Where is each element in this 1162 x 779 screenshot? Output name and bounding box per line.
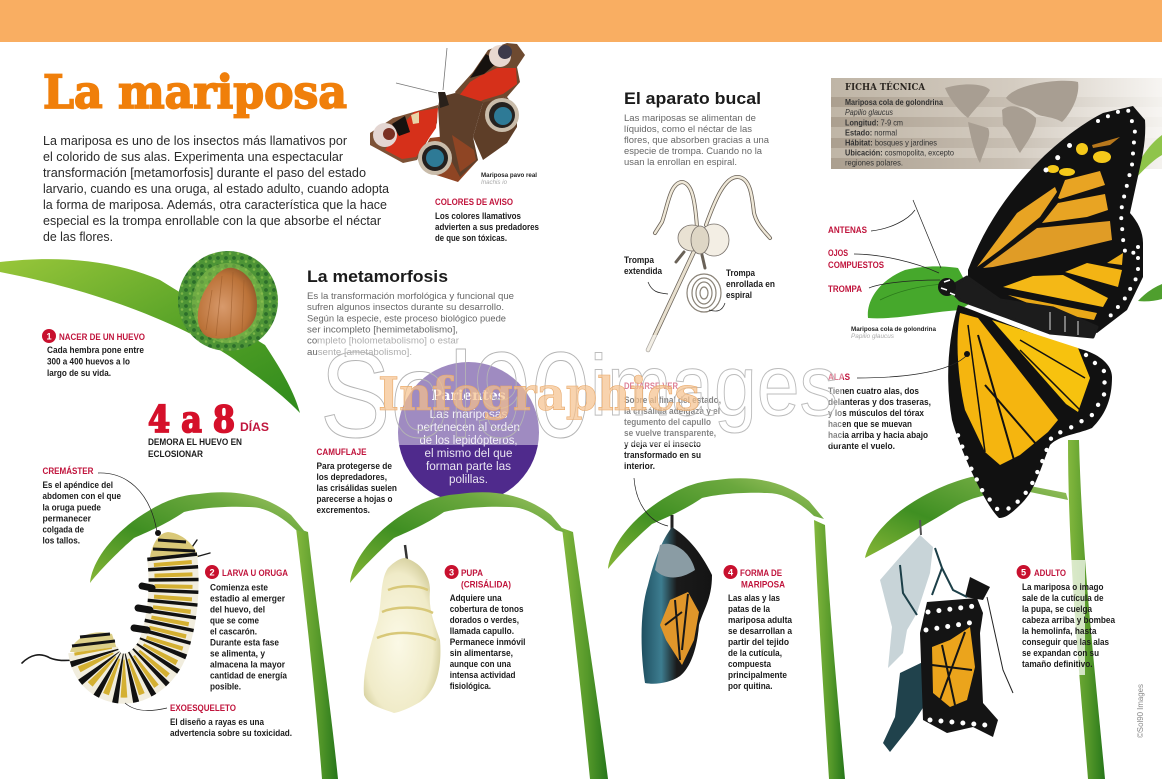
metamorfosis text: ausente [ametabolismo]. <box>307 347 412 358</box>
stat: 4 a 8 días: DÍAS <box>240 419 269 434</box>
step 2: larva: 2 <box>209 568 215 578</box>
panel: ficha técnica: Hábitat: bosques y jardines <box>845 138 937 148</box>
monarch butterfly <box>938 106 1145 518</box>
callout: colores de aviso: de que son tóxicas. <box>435 233 507 243</box>
step 4: forma de mariposa: patas de la <box>728 604 771 614</box>
callout: dejarse ver: la crisálida adelgaza y el <box>624 406 720 416</box>
panel: ficha técnica: regiones polares. <box>845 158 903 168</box>
step 3: pupa: aunque con una <box>450 659 512 669</box>
callout: dejarse ver <box>624 381 721 471</box>
step 3: pupa: llamada capullo. <box>450 626 514 636</box>
labels: trompa: Trompa <box>726 268 756 278</box>
step 3: pupa: intensa actividad <box>450 670 516 680</box>
metamorfosis text: ser incompleto [hemimetabolismo], <box>307 324 458 336</box>
callout: alas <box>828 372 931 451</box>
emerging butterfly <box>880 520 1013 752</box>
intro text: larvario, cuando es una oruga, al estado adulto, cuando adopta <box>43 181 390 196</box>
step 3: pupa: cobertura de tonos <box>450 604 524 614</box>
callout line: chrysalis <box>634 478 668 526</box>
callout: dejarse ver: Sobre al final del estado, <box>624 395 721 405</box>
peacock butterfly <box>370 43 525 182</box>
step 2: larva: se alimenta, y <box>210 648 266 658</box>
aparato bucal text <box>624 113 770 168</box>
step 2: larva <box>205 565 288 692</box>
callout: colores de aviso: advierten a sus predadores <box>435 222 539 232</box>
watermark: Sol90 <box>320 327 590 463</box>
metamorfosis heading: La metamorfosis <box>307 267 448 286</box>
step 2: larva: LARVA U ORUGA <box>222 568 288 578</box>
intro text: especial es la trompa enrollable con la que absorbe el néctar <box>43 213 382 228</box>
callout: dejarse ver: interior. <box>624 461 655 471</box>
callout lines: caterpillar <box>98 473 167 711</box>
callout: camuflaje: parecerse a hojas o <box>316 494 393 504</box>
watermark veil <box>318 335 843 445</box>
callout: camuflaje: las crisálidas suelen <box>316 483 397 493</box>
panel: ficha técnica: Longitud: 7-9 cm <box>845 118 903 128</box>
callout: cremáster: los tallos. <box>42 536 80 546</box>
callout: colores de aviso <box>435 197 539 243</box>
step 3: pupa: Adquiere una <box>450 593 502 603</box>
panel: ficha técnica <box>831 78 1162 169</box>
step 5: adulto: ADULTO <box>1034 568 1066 578</box>
aparato bucal heading: El aparato bucal <box>624 89 761 108</box>
step 4: forma de mariposa: Las alas y las <box>728 593 780 603</box>
watermark: Infographics <box>378 367 700 421</box>
callout: cremáster: CREMÁSTER <box>42 465 94 476</box>
step 1: nacer de un huevo: Cada hembra pone entre <box>47 345 144 355</box>
step 5: adulto: 5 <box>1021 568 1026 578</box>
callout: camuflaje <box>316 447 397 515</box>
stat: 4 a 8 días: 4 a 8 <box>148 399 235 441</box>
step 4: forma de mariposa <box>724 565 793 691</box>
leaf 2 <box>350 492 566 583</box>
step 3: pupa: fisiológica. <box>450 681 491 691</box>
intro text: transformación [metamorfosis] durante el paso del estado <box>43 165 366 180</box>
callout: exoesqueleto <box>170 703 292 738</box>
stat: 4 a 8 días <box>148 399 269 459</box>
callout: exoesqueleto: EXOESQUELETO <box>170 703 236 713</box>
labels: trompa: Trompa <box>624 255 655 265</box>
callout: dejarse ver: tegumento del capullo <box>624 417 711 427</box>
icon: world map <box>945 81 1078 163</box>
callout: alas: hacia arriba y hacia abajo <box>828 430 928 440</box>
aparato bucal text: líquidos, como el néctar de las <box>624 124 752 135</box>
panel: ficha técnica: FICHA TÉCNICA <box>845 81 926 93</box>
stem 1 <box>296 528 338 779</box>
step 3: pupa: 3 <box>449 568 454 578</box>
step 4: forma de mariposa: 4 <box>728 568 734 578</box>
labels: antenas, ojos, trompa: COMPUESTOS <box>828 260 884 270</box>
parientes text <box>417 388 520 486</box>
aparato bucal text: especie de trompa. Cuando no la <box>624 146 763 157</box>
labels: antenas, ojos, trompa: ANTENAS <box>828 225 867 235</box>
step 1: nacer de un huevo <box>42 329 145 378</box>
egg leaf <box>0 259 300 413</box>
stat: 4 a 8 días: ECLOSIONAR <box>148 449 203 459</box>
callout: exoesqueleto: advertencia sobre su toxicidad. <box>170 728 292 738</box>
callout: colores de aviso: COLORES DE AVISO <box>435 197 513 207</box>
step 2: larva: el cascarón. <box>210 626 257 636</box>
step 4: forma de mariposa: MARIPOSA <box>741 580 785 590</box>
intro text: la forma de mariposa. Además, otra característica que la hace <box>43 197 387 212</box>
intro text: el colorido de sus alas. Experimenta una espectacular <box>43 149 344 164</box>
callout: dejarse ver: DEJARSE VER <box>624 381 678 391</box>
stat: 4 a 8 días: DEMORA EL HUEVO EN <box>148 437 242 447</box>
callout: camuflaje: Para protegerse de <box>316 461 392 471</box>
parientes text: Las mariposas <box>430 407 508 421</box>
caption: monarch: Mariposa cola de golondrina <box>851 326 936 333</box>
step 2: larva: posible. <box>210 682 241 692</box>
panel: ficha técnica: Ubicación: cosmopolita, excepto <box>845 148 954 158</box>
chrysalis <box>642 515 712 684</box>
stem 5 <box>1068 440 1105 779</box>
caterpillar <box>22 530 210 679</box>
caption: peacock: Mariposa pavo real <box>481 172 537 179</box>
step 5: adulto: la hemolinfa, hasta <box>1022 626 1097 636</box>
step 5: adulto: sale de la cutícula de <box>1022 593 1104 603</box>
step 4: forma de mariposa: se desarrollan a <box>728 626 793 636</box>
parientes text: Parientes <box>431 388 506 404</box>
step 1: nacer de un huevo: 1 <box>46 332 52 342</box>
stem 3 <box>814 520 845 779</box>
parientes text: forman parte las <box>426 459 511 473</box>
callout: dejarse ver: y deja ver el insecto <box>624 439 701 449</box>
step 1: nacer de un huevo: largo de su vida. <box>47 368 111 378</box>
callout: colores de aviso: Los colores llamativos <box>435 211 521 221</box>
metamorfosis text <box>307 291 514 358</box>
parientes text: de los lepidópteros, <box>420 433 518 447</box>
labels: trompa: enrollada en <box>726 279 775 289</box>
callout: cremáster: permanecer <box>42 514 91 524</box>
callout: camuflaje: excrementos. <box>316 505 370 515</box>
labels: trompa <box>624 255 775 300</box>
step 1: nacer de un huevo: NACER DE UN HUEVO <box>59 332 145 342</box>
labels: trompa: extendida <box>624 266 663 276</box>
caption: monarch: Papilio glaucus <box>851 333 895 340</box>
step 3: pupa: (CRISÁLIDA) <box>461 578 511 590</box>
step 4: forma de mariposa: FORMA DE <box>740 568 782 578</box>
leaf 4 <box>865 476 1068 558</box>
step 4: forma de mariposa: de la cutícula, <box>728 648 782 658</box>
callout: cremáster: colgada de <box>42 524 84 534</box>
step 2: larva: estadio al emerger <box>210 594 285 604</box>
leaf 1 <box>90 492 306 583</box>
step 3: pupa: PUPA <box>461 568 483 578</box>
intro text: La mariposa es uno de los insectos más llamativos por <box>43 133 348 148</box>
step 5: adulto: conseguir que las alas <box>1022 637 1109 647</box>
step 3: pupa: dorados o verdes, <box>450 615 519 625</box>
step 3: pupa: sin alimentarse, <box>450 648 513 658</box>
parientes text: pertenecen al orden <box>417 420 520 434</box>
metamorfosis text: completo [holometabolismo] o estar <box>307 336 460 346</box>
intro text: de las flores. <box>43 229 113 244</box>
step 3: pupa: Permanece inmóvil <box>450 637 526 647</box>
top band <box>0 0 1162 42</box>
panel: ficha técnica: Papilio glaucus <box>845 108 893 117</box>
intro text <box>43 133 390 244</box>
callout: cremáster: la oruga puede <box>42 502 101 512</box>
text backing on stem <box>1033 560 1085 675</box>
step 5: adulto: se expandan con su <box>1022 648 1099 658</box>
step 5: adulto: cabeza arriba y bombea <box>1022 615 1116 625</box>
labels: antenas, ojos, trompa <box>828 225 884 294</box>
leaves behind monarch <box>868 135 1162 318</box>
dot: alas <box>964 351 970 357</box>
leaf 3 <box>608 478 824 569</box>
callout: exoesqueleto: El diseño a rayas es una <box>170 717 265 727</box>
step 1: nacer de un huevo: 300 a 400 huevos a lo <box>47 356 130 366</box>
callout: alas: durante el vuelo. <box>828 441 895 451</box>
pupa <box>364 545 440 713</box>
callout: alas: Tienen cuatro alas, dos <box>828 386 919 396</box>
step 2: larva: cantidad de energía <box>210 670 288 680</box>
caption: peacock: Inachis io <box>481 179 507 186</box>
step 4: forma de mariposa: por quitina. <box>728 681 772 691</box>
callout: camuflaje: los depredadores, <box>316 472 387 482</box>
step 2: larva: del huevo, del <box>210 604 265 614</box>
step 2: larva: Comienza este <box>210 582 268 592</box>
step 4: forma de mariposa: mariposa adulta <box>728 615 793 625</box>
step 3: pupa <box>445 565 526 691</box>
panel: ficha técnica: Estado: normal <box>845 128 897 138</box>
aparato bucal text: usan la enrollan en espiral. <box>624 157 737 168</box>
step 2: larva: Durante esta fase <box>210 638 279 648</box>
step 5: adulto: la pupa, se cuelga <box>1022 604 1093 614</box>
caption: monarch <box>851 326 936 340</box>
callout: alas: ALAS <box>828 372 850 382</box>
labels: antenas, ojos, trompa: OJOS <box>828 248 848 258</box>
panel: ficha técnica: Mariposa cola de golondrina <box>845 98 943 107</box>
labels: antenas, ojos, trompa: TROMPA <box>828 284 862 294</box>
parientes text: polillas. <box>449 472 488 486</box>
step 4: forma de mariposa: principalmente <box>728 670 787 680</box>
metamorfosis text: sufren algunos insectos durante su desarrollo. <box>307 302 504 313</box>
callout: alas: delanteras y dos traseras, <box>828 397 931 407</box>
caption: peacock <box>481 172 537 186</box>
callout: alas: hacen que se muevan <box>828 419 912 429</box>
callout: dejarse ver: transformado en su <box>624 450 701 460</box>
step 5: adulto: La mariposa o imago <box>1022 582 1104 592</box>
callout: cremáster: abdomen con el que <box>42 491 121 501</box>
stem 2 <box>562 528 608 779</box>
callout: cremáster <box>42 465 121 546</box>
aparato bucal text: flores, que absorben gracias a una <box>624 135 770 146</box>
step 5: adulto: tamaño definitivo. <box>1022 659 1093 669</box>
metamorfosis text: Según la especie, este proceso biológico puede <box>307 314 506 324</box>
step 5: adulto <box>1017 565 1116 669</box>
proboscis illustration <box>648 177 770 350</box>
callout: alas: y los músculos del tórax <box>828 408 925 418</box>
aparato bucal text: Las mariposas se alimentan de <box>624 113 756 124</box>
callout: dejarse ver: se vuelve transparente, <box>624 428 716 438</box>
callout: camuflaje: CAMUFLAJE <box>316 447 366 457</box>
watermark <box>320 327 838 463</box>
step 2: larva: almacena la mayor <box>210 660 285 670</box>
step 2: larva: que se come <box>210 616 259 626</box>
egg photo circle <box>178 251 278 351</box>
circle: parientes <box>398 362 539 503</box>
watermark: images <box>590 338 838 434</box>
credit: ©Sol90 Images <box>1136 684 1145 738</box>
step 4: forma de mariposa: partir del tejido <box>728 637 789 647</box>
callout lines: monarch <box>854 200 968 378</box>
step 4: forma de mariposa: compuesta <box>728 659 772 669</box>
callout: cremáster: Es el apéndice del <box>42 480 113 490</box>
metamorfosis text: Es la transformación morfológica y funcional que <box>307 291 514 302</box>
labels: trompa: espiral <box>726 290 752 300</box>
parientes text: el mismo del que <box>424 446 513 460</box>
title: La mariposa <box>43 65 347 119</box>
